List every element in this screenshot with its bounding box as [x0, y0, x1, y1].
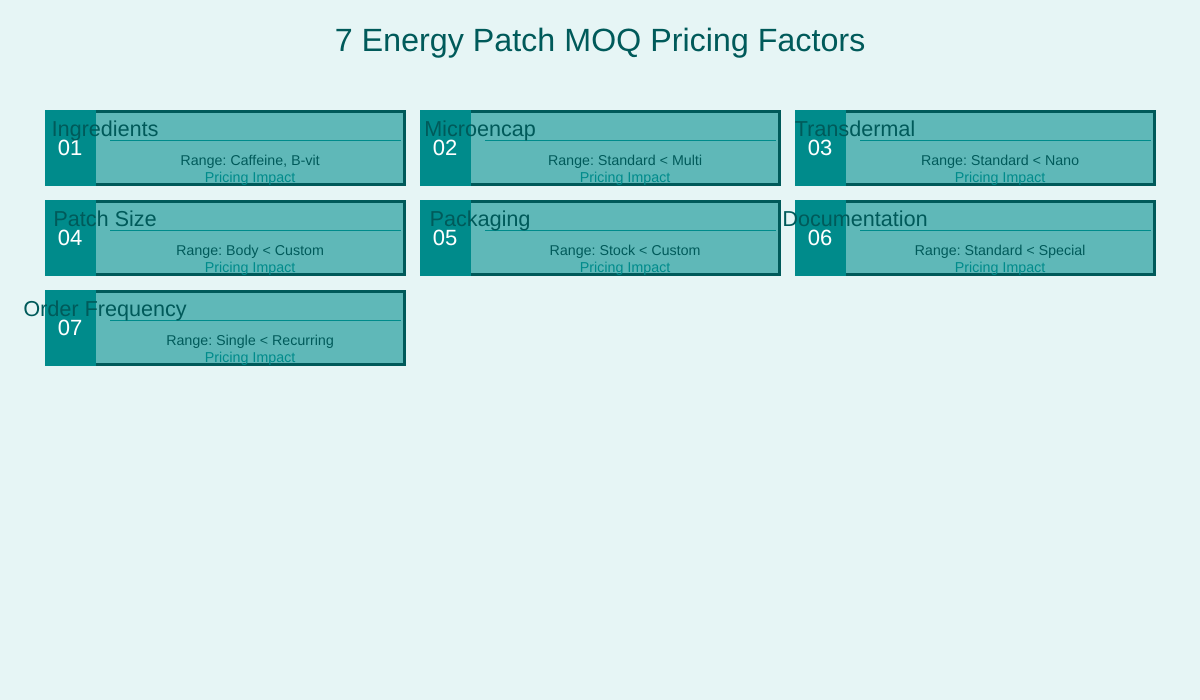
panel: factor 05 Packaging: Range: Stock < Custom	[550, 243, 700, 259]
panel: factor 02 Microencap: Microencap	[424, 116, 536, 141]
panel: factor 01 Ingredients: Range: Caffeine, B-vit	[180, 153, 320, 169]
panel: factor 03 Transdermal: 03	[808, 135, 832, 160]
panel: factor 05 Packaging	[420, 200, 780, 276]
panel: factor 03 Transdermal: Range: Standard < Nano	[921, 153, 1079, 169]
panel: factor 07 Order Frequency: Order Frequency	[23, 296, 187, 321]
panel: factor 01 Ingredients: Ingredients	[52, 116, 159, 141]
panel: factor 04 Patch Size	[45, 200, 404, 276]
panel: factor 07 Order Frequency: Range: Single < Recurring	[166, 333, 334, 349]
panel: factor 06 Documentation: 06	[808, 225, 832, 250]
panel: factor 02 Microencap	[420, 110, 780, 186]
panel: factor 06 Documentation: Pricing Impact	[955, 260, 1045, 276]
panel: factor 05 Packaging: Pricing Impact	[580, 260, 670, 276]
panel: factor 07 Order Frequency: Pricing Impact	[205, 350, 295, 366]
panel: factor 02 Microencap: Range: Standard < Multi	[548, 153, 702, 169]
panel: factor 04 Patch Size: 04	[58, 225, 82, 250]
panel: factor 01 Ingredients	[45, 110, 404, 186]
panel: factor 01 Ingredients: Pricing Impact	[205, 170, 295, 186]
panel: factor 05 Packaging: 05	[433, 225, 457, 250]
panel: factor 02 Microencap: Pricing Impact	[580, 170, 670, 186]
panel: factor 02 Microencap: 02	[433, 135, 457, 160]
panel: factor 06 Documentation	[782, 200, 1154, 276]
panel: factor 03 Transdermal: Transdermal	[795, 116, 915, 141]
title: 7 Energy Patch MOQ Pricing Factors	[335, 22, 865, 58]
panel: factor 06 Documentation: Range: Standard < Special	[915, 243, 1085, 259]
panel: factor 04 Patch Size: Patch Size	[53, 206, 157, 231]
panel: factor 03 Transdermal	[795, 110, 1154, 186]
panel: factor 03 Transdermal: Pricing Impact	[955, 170, 1045, 186]
panel: factor 06 Documentation: Documentation	[782, 206, 928, 231]
panel: factor 07 Order Frequency: 07	[58, 315, 82, 340]
panel: factor 01 Ingredients: 01	[58, 135, 82, 160]
panel: factor 07 Order Frequency	[23, 290, 404, 366]
panel: factor 05 Packaging: Packaging	[430, 206, 530, 231]
panel: factor 04 Patch Size: Range: Body < Custom	[176, 243, 324, 259]
panel: factor 04 Patch Size: Pricing Impact	[205, 260, 295, 276]
